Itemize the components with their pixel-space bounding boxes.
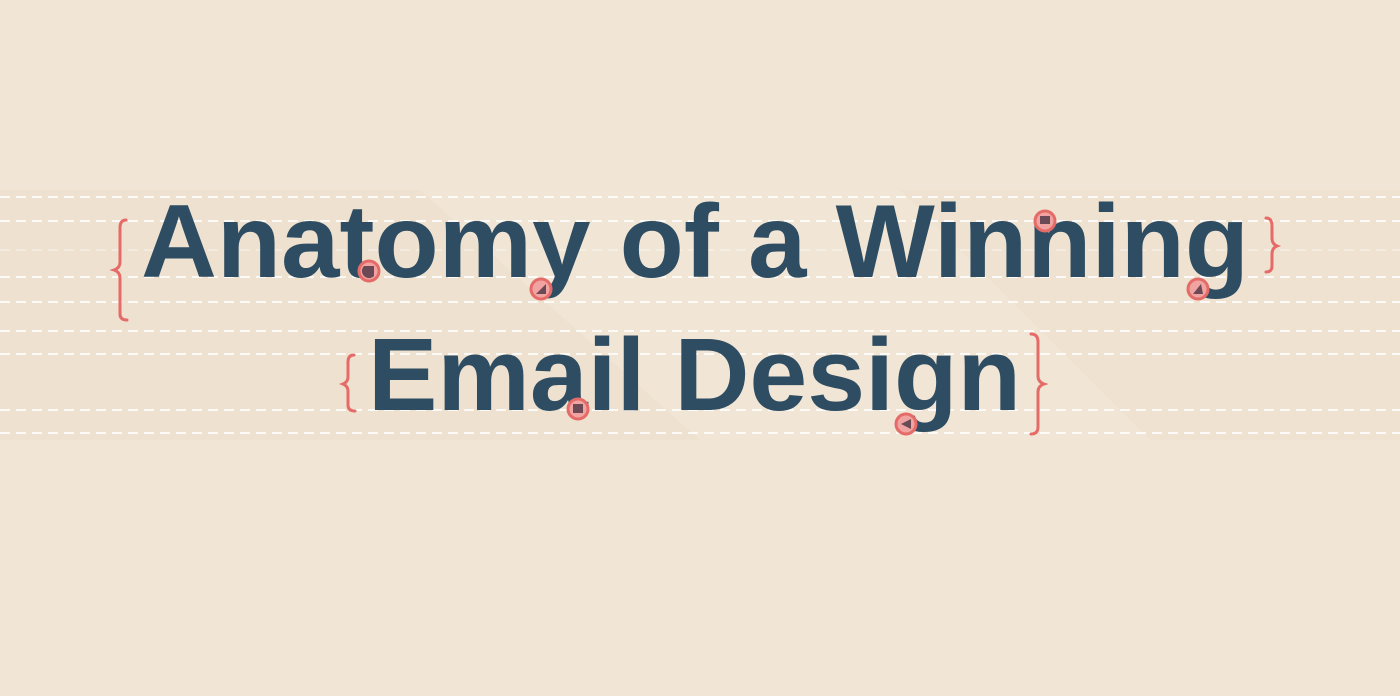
title line 2: Email Design: [368, 317, 1021, 432]
title line 1: Anatomy of a Winning: [141, 184, 1249, 300]
markers: [359, 211, 1208, 434]
brackets: [114, 218, 1277, 434]
title: [141, 184, 1249, 432]
